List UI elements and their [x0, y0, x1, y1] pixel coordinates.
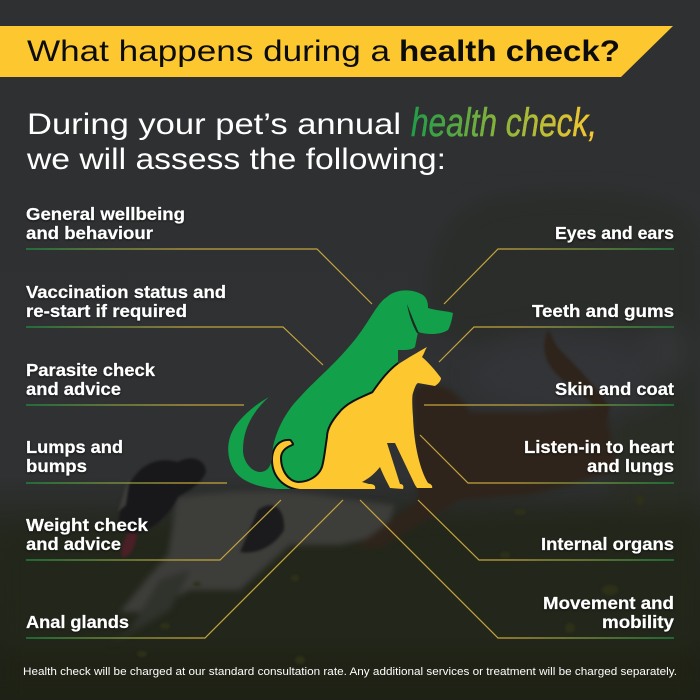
label: movement and mobility: Movement and	[543, 593, 674, 613]
title banner	[0, 26, 673, 77]
intro heading: health check,	[411, 101, 597, 145]
left labels	[26, 204, 226, 632]
label: parasite check: and advice	[26, 379, 121, 399]
label: weight check: and advice	[26, 534, 121, 554]
label: listen-in to heart and lungs: and lungs	[587, 456, 674, 476]
label: skin and coat: Skin and coat	[555, 379, 674, 399]
icon: green dog	[228, 290, 453, 489]
intro heading: During your pet’s annual	[27, 108, 401, 141]
label: anal glands: Anal glands	[26, 612, 129, 632]
label: parasite check: Parasite check	[26, 360, 155, 380]
intro heading: we will assess the following:	[26, 143, 446, 176]
label: lumps and bumps: Lumps and	[26, 437, 123, 457]
icon: cat outline over dog	[271, 362, 398, 489]
right connector lines	[360, 249, 674, 638]
right labels	[524, 223, 674, 632]
title text: health check?	[399, 35, 620, 68]
label: vaccination status: Vaccination status and	[26, 282, 226, 302]
label: internal organs: Internal organs	[541, 534, 674, 554]
left connector lines	[26, 249, 372, 638]
label: listen-in to heart and lungs: Listen-in to heart	[524, 437, 674, 457]
label: general wellbeing: General wellbeing	[26, 204, 185, 224]
title text: What happens during a	[27, 35, 390, 68]
title text	[27, 35, 620, 68]
footnote: Health check will be charged at our standard consultation rate. Any additional services or treatment will be charged separately.	[23, 666, 677, 678]
label: vaccination status: re-start if required	[26, 301, 187, 321]
label: lumps and bumps: bumps	[26, 456, 87, 476]
label: movement and mobility: mobility	[602, 612, 674, 632]
label: teeth and gums: Teeth and gums	[532, 301, 674, 321]
icon: dog and cat silhouette	[228, 290, 453, 489]
intro heading	[26, 101, 597, 176]
icon: yellow cat	[273, 347, 441, 489]
label: eyes and ears: Eyes and ears	[555, 223, 674, 243]
label: weight check: Weight check	[26, 515, 148, 535]
label: general wellbeing: and behaviour	[26, 223, 153, 243]
